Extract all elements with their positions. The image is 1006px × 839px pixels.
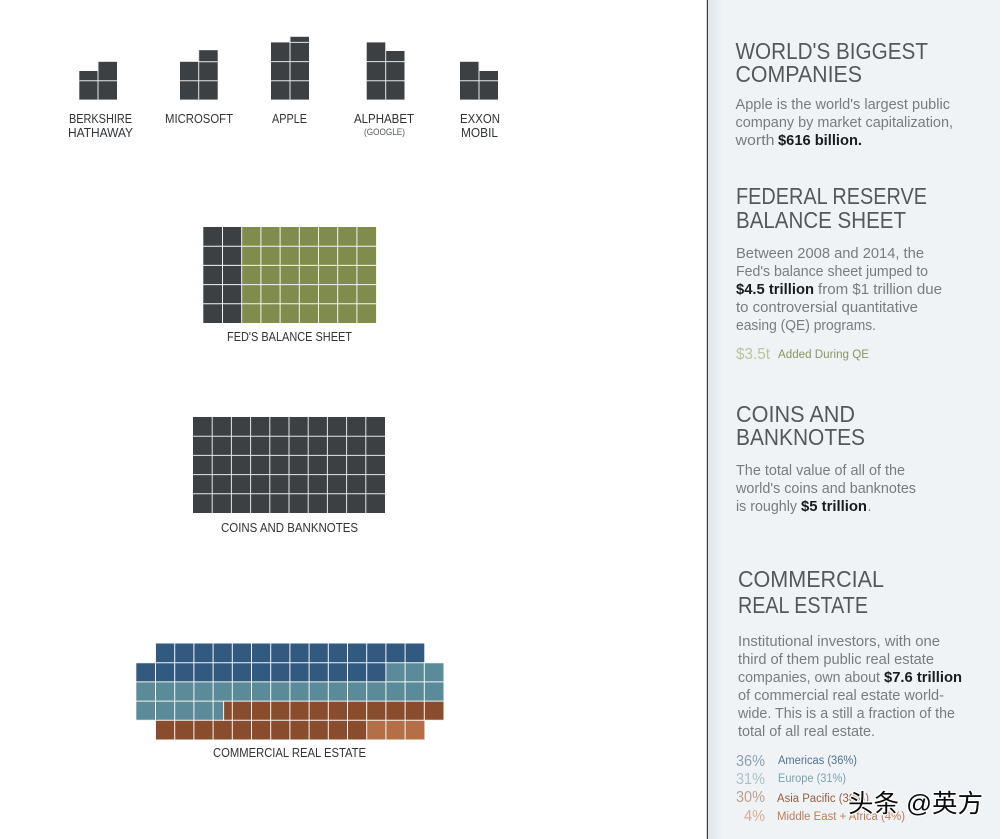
text block: Fed balance sheet growth: from $1 trillion due bbox=[818, 282, 942, 298]
heading: commercial real estate: COMMERCIAL bbox=[738, 566, 884, 592]
heading: commercial real estate: REAL ESTATE bbox=[738, 592, 868, 618]
label: Berkshire Hathaway: BERKSHIRE bbox=[69, 112, 132, 126]
heading: federal reserve balance sheet: FEDERAL RESERVE bbox=[736, 183, 927, 209]
text block: coins value: world's coins and banknotes bbox=[735, 481, 916, 497]
text block: Fed balance sheet growth: to controversial quantitative bbox=[736, 300, 918, 316]
section: coins and banknotes bbox=[735, 401, 916, 515]
legend: regional share: Middle East + Africa (4%) bbox=[777, 811, 905, 823]
heading: federal reserve balance sheet: BALANCE SHEET bbox=[736, 207, 906, 233]
section: federal reserve balance sheet bbox=[736, 183, 942, 363]
text block: institutional investors: $7.6 trillion bbox=[884, 670, 962, 686]
heading: world's biggest companies: COMPANIES bbox=[736, 61, 862, 87]
label: Alphabet (Google): (GOOGLE) bbox=[364, 127, 405, 137]
legend: regional share: 4% bbox=[744, 808, 765, 825]
watermark: 头条 @英方 bbox=[848, 790, 983, 818]
icon: Exxon Mobil blocks bbox=[460, 62, 498, 100]
legend: regional share: 31% bbox=[736, 771, 765, 788]
label: Alphabet (Google): ALPHABET bbox=[354, 112, 414, 126]
label: Apple: APPLE bbox=[272, 112, 307, 126]
legend: regional share: Asia Pacific (30%) bbox=[777, 793, 869, 805]
legend: regional share: 36% bbox=[736, 753, 765, 770]
label: Berkshire Hathaway bbox=[68, 112, 134, 140]
legend: regional share: 30% bbox=[736, 789, 765, 806]
label: coins and banknotes: COINS AND BANKNOTES bbox=[221, 521, 358, 535]
icon: Berkshire Hathaway blocks bbox=[79, 62, 117, 100]
text block: institutional investors bbox=[737, 634, 962, 740]
text block: institutional investors: Institutional investors, with one bbox=[738, 634, 940, 650]
legend: added during QE: $3.5t bbox=[736, 346, 771, 363]
text block: Apple market cap: company by market capitalization, bbox=[736, 115, 953, 131]
label: Exxon Mobil: MOBIL bbox=[461, 126, 498, 140]
text block: Apple market cap bbox=[734, 97, 953, 149]
label: Alphabet (Google) bbox=[354, 112, 414, 137]
text block: Fed balance sheet growth: Fed's balance sheet jumped to bbox=[736, 264, 928, 280]
label: Exxon Mobil bbox=[460, 112, 500, 140]
text block: institutional investors: total of all real estate. bbox=[738, 724, 875, 740]
icon: Apple blocks bbox=[271, 37, 309, 100]
chart: five biggest companies bbox=[68, 37, 500, 140]
label: Fed's balance sheet: FED'S BALANCE SHEET bbox=[227, 330, 352, 344]
text block: Fed balance sheet growth: $4.5 trillion bbox=[736, 282, 814, 298]
section: commercial real estate bbox=[736, 566, 962, 825]
text block: coins value: The total value of all of the bbox=[736, 463, 905, 479]
heading: coins and banknotes: COINS AND bbox=[736, 401, 855, 427]
label: Exxon Mobil: EXXON bbox=[460, 112, 500, 126]
icon: Alphabet blocks bbox=[367, 42, 404, 100]
legend: regional share: Americas (36%) bbox=[778, 755, 857, 767]
label: commercial real estate: COMMERCIAL REAL ESTATE bbox=[213, 746, 366, 760]
heading: commercial real estate bbox=[738, 566, 884, 618]
text block: Fed balance sheet growth: Between 2008 and 2014, the bbox=[736, 246, 924, 262]
text block: coins value: $5 trillion bbox=[801, 499, 867, 515]
heading: coins and banknotes bbox=[736, 401, 865, 450]
text block: institutional investors: of commercial real estate world- bbox=[738, 688, 944, 704]
section: world's biggest companies bbox=[734, 38, 953, 149]
legend: regional share bbox=[736, 753, 905, 825]
text block: institutional investors: companies, own about bbox=[738, 670, 880, 686]
text block: Fed balance sheet growth: easing (QE) programs. bbox=[736, 318, 876, 334]
label: Microsoft: MICROSOFT bbox=[165, 112, 233, 126]
heading: world's biggest companies: WORLD'S BIGGEST bbox=[736, 38, 928, 64]
text block: Fed balance sheet growth bbox=[736, 246, 942, 334]
chart: Fed's balance sheet grid bbox=[203, 227, 376, 323]
text block: institutional investors: third of them public real estate bbox=[738, 652, 934, 668]
heading: world's biggest companies bbox=[736, 38, 928, 87]
text block: Apple market cap: $616 billion. bbox=[778, 133, 862, 149]
label: Berkshire Hathaway: HATHAWAY bbox=[68, 126, 134, 140]
chart: commercial real estate grid bbox=[136, 643, 444, 740]
legend: added during QE bbox=[736, 346, 869, 363]
heading: federal reserve balance sheet bbox=[736, 183, 927, 233]
text block: coins value bbox=[735, 463, 916, 515]
text block: coins value: . bbox=[868, 499, 872, 515]
legend: regional share: Europe (31%) bbox=[778, 773, 846, 785]
legend: added during QE: Added During QE bbox=[778, 349, 869, 361]
text block: Apple market cap: worth bbox=[734, 133, 774, 149]
text block: Apple market cap: Apple is the world's largest public bbox=[736, 97, 950, 113]
text block: institutional investors: wide. This is a still a fraction of the bbox=[737, 706, 955, 722]
icon: Microsoft blocks bbox=[180, 50, 218, 100]
heading: coins and banknotes: BANKNOTES bbox=[736, 424, 865, 450]
text block: coins value: is roughly bbox=[736, 499, 798, 515]
chart: coins and banknotes grid bbox=[193, 417, 385, 513]
panel: sidebar background bbox=[707, 0, 1000, 839]
